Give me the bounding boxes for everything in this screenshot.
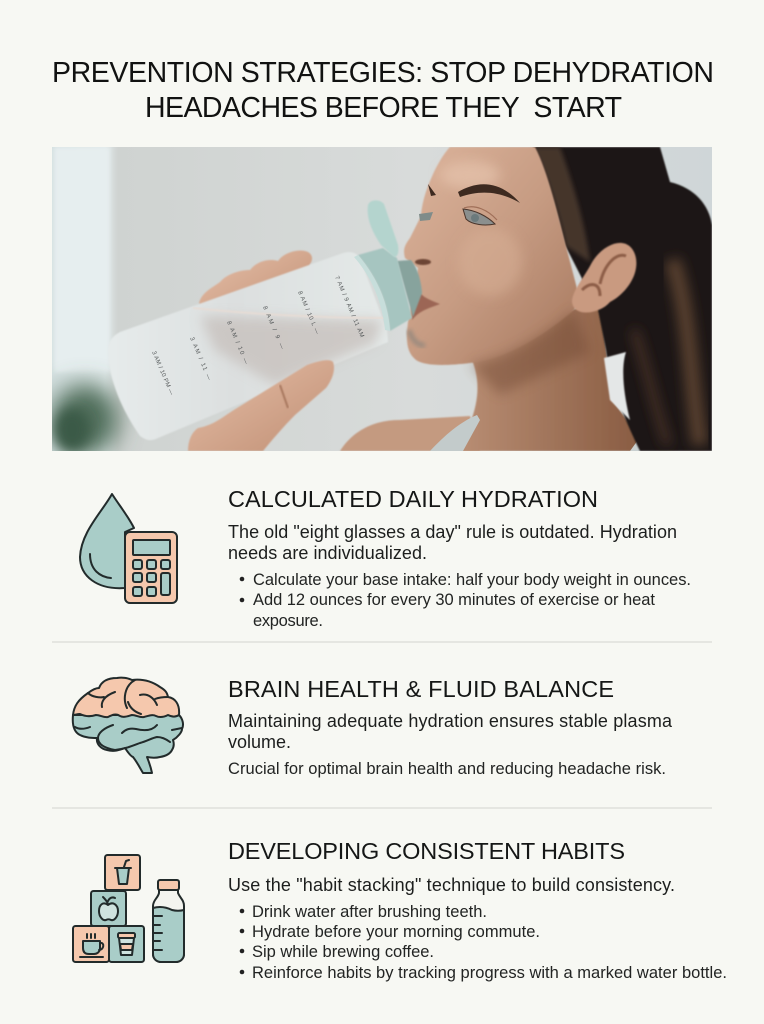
neck and chest — [463, 308, 636, 451]
section 3 heading: DEVELOPING CONSISTENT HABITS — [228, 838, 625, 864]
droplet — [80, 494, 134, 588]
section 3 intro: Use the "habit stacking" technique to build consistency. — [228, 875, 675, 895]
section 1 bullets: Calculate your base intake: half your body weight in ounces. — [253, 571, 691, 589]
face — [404, 147, 580, 365]
time labels on bottle — [150, 275, 364, 396]
ear — [572, 243, 636, 313]
section 1 bullets: Add 12 ounces for every 30 minutes of exercise or heat — [253, 591, 655, 609]
section 3 icon: habit blocks and bottle — [73, 855, 184, 962]
section 1 bullets — [240, 571, 691, 630]
section 1 heading: CALCULATED DAILY HYDRATION — [228, 486, 598, 512]
section 1 intro: The old "eight glasses a day" rule is outdated. Hydration — [228, 522, 677, 542]
hair — [533, 147, 712, 451]
section 2 icon: brain — [73, 678, 183, 773]
title: HEADACHES BEFORE THEY START — [145, 92, 622, 124]
bottle neck — [397, 260, 422, 317]
title — [52, 57, 714, 124]
white tank top — [430, 415, 480, 451]
bottle — [108, 200, 422, 440]
nose shadow and mouth — [415, 259, 431, 265]
section 2 text: Crucial for optimal brain health and reducing headache risk. — [228, 760, 666, 778]
section 3 bullets: Hydrate before your morning commute. — [252, 923, 540, 941]
eye — [463, 209, 495, 225]
water bottle — [153, 880, 184, 962]
section 1 intro: needs are individualized. — [228, 543, 427, 563]
section 1 icon: droplet and calculator — [80, 494, 177, 603]
section 3 bullets — [240, 903, 727, 982]
bottle body — [108, 252, 388, 440]
time labels on bottle: 8 AM / 9 — — [261, 305, 285, 350]
time labels on bottle: 3 AM / 11 — — [188, 336, 212, 381]
eyebrow — [428, 184, 520, 203]
section 2 heading: BRAIN HEALTH & FLUID BALANCE — [228, 676, 614, 702]
bottle cap — [358, 248, 412, 331]
time labels on bottle: 7 AM / 9 AM / 11 AM — [333, 275, 364, 339]
block: hot coffee — [73, 926, 109, 962]
block: apple — [91, 891, 126, 926]
brain folds — [75, 680, 182, 750]
flip lid — [368, 200, 398, 257]
thumb and palm — [188, 360, 334, 451]
time labels on bottle: 8 AM / 10 — — [225, 320, 249, 365]
time labels on bottle: 3 AM / 10 PM — — [150, 350, 174, 396]
brain lower half — [73, 715, 183, 773]
section 1 intro — [228, 522, 677, 563]
shoulder — [340, 416, 480, 451]
section 2 text: volume. — [228, 732, 291, 752]
calculator — [125, 532, 177, 603]
section 3 bullets: Drink water after brushing teeth. — [252, 903, 487, 921]
white garment behind neck — [604, 352, 630, 420]
section 3 bullets: Reinforce habits by tracking progress with a marked water bottle. — [252, 964, 727, 982]
section 2 text: Maintaining adequate hydration ensures stable plasma — [228, 711, 673, 731]
hand: fingers behind bottle — [198, 250, 313, 304]
block: takeaway cup — [109, 926, 144, 962]
title: PREVENTION STRATEGIES: STOP DEHYDRATION — [52, 57, 714, 89]
photo: woman drinking from a marked water bottle — [51, 147, 712, 456]
section 3 bullets: Sip while brewing coffee. — [252, 943, 434, 961]
section 2 text — [228, 711, 673, 778]
section 1 bullets: exposure. — [253, 612, 323, 630]
block: drink cup — [105, 855, 140, 890]
time labels on bottle: 8 AM / 10 L — — [296, 290, 320, 335]
brain upper half — [73, 678, 179, 717]
